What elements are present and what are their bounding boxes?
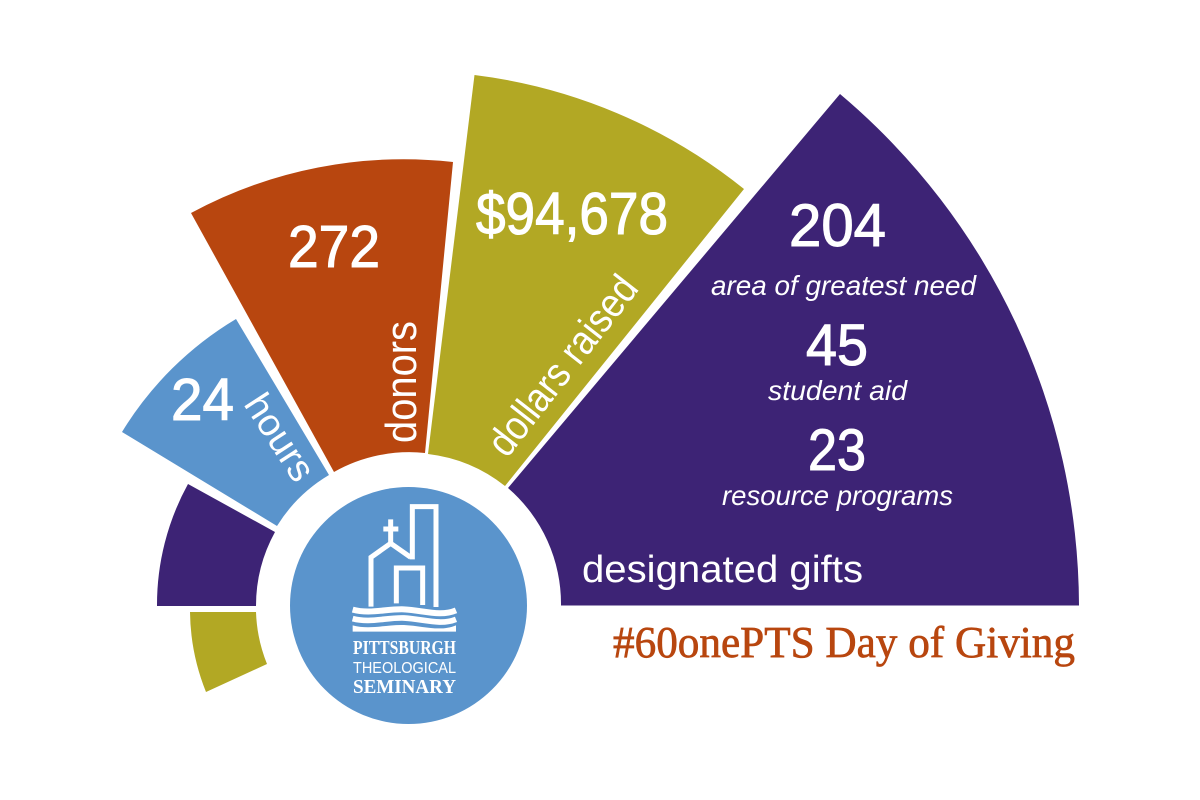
label: hours: hours <box>235 386 323 489</box>
label: student aid: student aid <box>768 375 908 406</box>
panel: dollars raised wedge <box>428 75 744 486</box>
logo: Pittsburgh Theological Seminary <box>290 487 527 724</box>
panel: hours wedge <box>122 319 329 526</box>
logo text: Pittsburgh: PITTSBURGH <box>353 637 456 659</box>
small olive wedge <box>190 612 267 692</box>
stat: 45: 45 <box>806 313 868 378</box>
icon: church, tower and waves <box>353 507 456 632</box>
stat: $94,678: $94,678 <box>476 181 668 247</box>
small purple wedge <box>157 484 275 606</box>
label: designated gifts: designated gifts <box>582 549 863 591</box>
stat: 24: 24 <box>171 367 234 433</box>
label: area of greatest need: area of greatest need <box>711 270 977 301</box>
panel: donors wedge <box>191 159 453 472</box>
logo text: Theological: THEOLOGICAL <box>353 660 456 677</box>
stat: 204: 204 <box>789 192 886 259</box>
label: donors: donors <box>377 321 426 443</box>
logo text: Seminary: SEMINARY <box>353 676 457 698</box>
stat: 23: 23 <box>808 418 866 483</box>
stat: 272: 272 <box>288 214 380 280</box>
panel: designated gifts wedge <box>508 94 1079 606</box>
label: resource programs: resource programs <box>722 480 953 511</box>
label: dollars raised: dollars raised <box>478 266 647 465</box>
title: #60onePTS Day of Giving: #60onePTS Day of Giving <box>613 618 1075 667</box>
